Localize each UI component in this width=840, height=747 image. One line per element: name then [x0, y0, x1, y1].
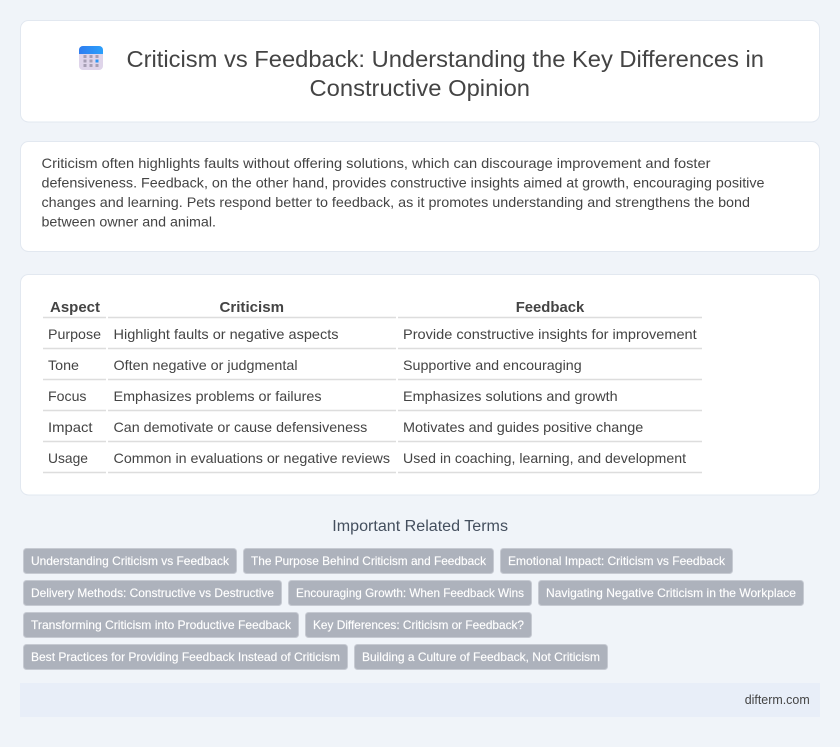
row: usage: Usage [48, 450, 88, 466]
tag [24, 548, 236, 574]
tag [288, 580, 532, 606]
row: usage: Common in evaluations or negative reviews [114, 450, 390, 466]
row: purpose [48, 326, 697, 342]
table header: Aspect [50, 299, 100, 316]
tag [354, 644, 608, 670]
panel: description [20, 142, 820, 252]
tag: Key Differences: Criticism or Feedback? [313, 618, 524, 632]
row: focus: Focus [48, 388, 86, 404]
tag [500, 548, 732, 574]
icon: calendar [79, 46, 103, 70]
row: tone: Often negative or judgmental [114, 357, 298, 373]
tag: Understanding Criticism vs Feedback [31, 554, 230, 568]
heading: important related terms: Important Related Terms [332, 518, 508, 535]
tag [24, 580, 282, 606]
table header: Criticism [220, 299, 284, 316]
row: impact: Can demotivate or cause defensiveness [114, 419, 367, 435]
title [126, 46, 764, 101]
text block: description: Criticism often highlights faults without offering solutions, which can discourage improvement and foster [42, 155, 711, 171]
tag [24, 612, 298, 638]
tag [306, 612, 532, 638]
tag [244, 548, 494, 574]
tag: Emotional Impact: Criticism vs Feedback [508, 554, 726, 568]
row: purpose: Highlight faults or negative aspects [114, 326, 338, 342]
row: focus [48, 388, 618, 404]
title: Criticism vs Feedback: Understanding the Key Differences in [126, 46, 764, 72]
row: impact [48, 419, 644, 435]
footer: difterm.com [745, 692, 810, 707]
panel: header [20, 20, 820, 122]
row: tone: Supportive and encouraging [403, 357, 582, 373]
table header: Feedback [516, 299, 585, 316]
tag [24, 644, 348, 670]
tag: Encouraging Growth: When Feedback Wins [296, 586, 524, 600]
row: impact: Impact [48, 419, 93, 435]
panel: comparison table [20, 274, 820, 495]
tag: Best Practices for Providing Feedback Instead of Criticism [31, 650, 340, 664]
row: tone: Tone [48, 357, 79, 373]
row: purpose: Provide constructive insights for improvement [403, 326, 697, 342]
row: focus: Emphasizes solutions and growth [403, 388, 618, 404]
tag list [24, 548, 804, 670]
text block: description: between owner and animal. [42, 214, 216, 230]
row: usage: Used in coaching, learning, and development [403, 450, 686, 466]
footer [20, 683, 820, 717]
tag: Transforming Criticism into Productive Feedback [31, 618, 292, 632]
title: Constructive Opinion [310, 75, 530, 101]
text block: description: defensiveness. Feedback, on the other hand, provides constructive insights aimed at growth, encouraging positive [42, 174, 765, 190]
row: tone [48, 357, 582, 373]
row: purpose: Purpose [48, 326, 101, 342]
tag: Building a Culture of Feedback, Not Criticism [362, 650, 600, 664]
table header [50, 299, 585, 316]
tag: Navigating Negative Criticism in the Workplace [546, 586, 796, 600]
row: focus: Emphasizes problems or failures [114, 388, 322, 404]
row: impact: Motivates and guides positive change [403, 419, 644, 435]
text block: description [42, 155, 765, 230]
tag: Delivery Methods: Constructive vs Destructive [31, 586, 274, 600]
tag: The Purpose Behind Criticism and Feedback [251, 554, 487, 568]
tag [538, 580, 804, 606]
row: usage [48, 450, 686, 466]
text block: description: changes and learning. Pets respond better to feedback, as it promotes understanding and strengthens the bond [42, 194, 750, 210]
